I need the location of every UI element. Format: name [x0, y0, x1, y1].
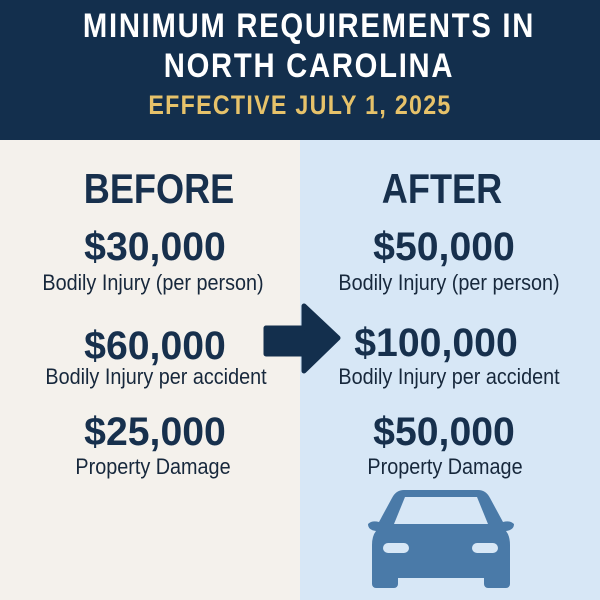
title: MINIMUM REQUIREMENTS IN	[83, 7, 535, 45]
heading before: BEFORE	[84, 165, 234, 212]
amount 2: $60,000	[84, 324, 226, 368]
label 2: Bodily Injury per accident	[338, 364, 560, 389]
label 1: Bodily Injury (per person)	[42, 270, 264, 295]
amount 2: $100,000	[354, 321, 518, 365]
amount 1: $30,000	[84, 225, 226, 269]
subtitle: EFFECTIVE JULY 1, 2025	[148, 90, 452, 120]
panel: after	[300, 140, 600, 600]
amount 3: $50,000	[373, 410, 515, 454]
amount 1: $50,000	[373, 225, 515, 269]
title	[83, 7, 535, 85]
heading after: AFTER	[382, 165, 502, 212]
label 3: Property Damage	[75, 454, 231, 479]
amount 3: $25,000	[84, 410, 226, 454]
panel: before	[0, 140, 300, 600]
label 2: Bodily Injury per accident	[45, 364, 267, 389]
label 3: Property Damage	[367, 454, 523, 479]
label 1: Bodily Injury (per person)	[338, 270, 560, 295]
title: NORTH CAROLINA	[164, 47, 454, 85]
header	[0, 0, 600, 140]
